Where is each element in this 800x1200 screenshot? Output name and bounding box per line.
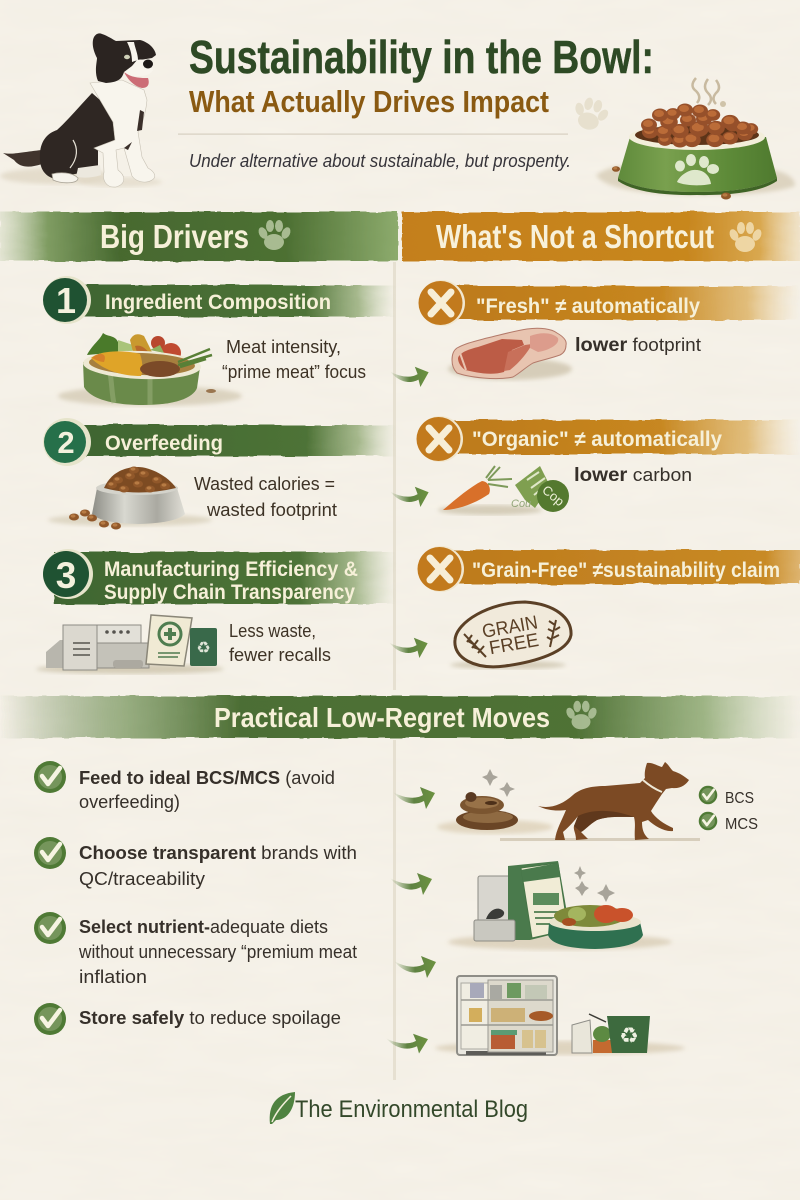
move 1: overfeeding)	[79, 792, 180, 812]
shortcut 3 heading	[418, 546, 800, 592]
driver 1 heading: 1	[56, 280, 76, 321]
move 2: QC/traceability	[79, 869, 205, 889]
icon: factory equipment, certificate and recycling bin: ♻	[196, 640, 211, 657]
driver 2 note: Wasted calories =	[194, 474, 335, 494]
shortcut 1 heading	[418, 280, 800, 326]
driver 1 note: “prime meat” focus	[222, 362, 366, 382]
icon: carrot and coupon: Cop	[539, 482, 567, 509]
arrow: move 2	[390, 873, 432, 895]
arrow: overfeeding to organic	[390, 487, 429, 507]
driver 2 heading: Overfeeding	[105, 432, 223, 455]
driver 1 note	[222, 337, 366, 382]
move 2: Choose transparent brands with	[79, 843, 357, 863]
move 3: Select nutrient-adequate diets	[79, 917, 328, 937]
arrow: move 3	[394, 956, 436, 978]
column divider lower	[393, 740, 396, 1080]
BCS and MCS checks: MCS	[725, 816, 758, 833]
move 4	[34, 1003, 341, 1035]
panel header: Big Drivers: Big Drivers	[100, 218, 249, 255]
illustration: fridge storage and recycling: ♻	[619, 1023, 639, 1048]
arrow: move 4	[386, 1034, 428, 1054]
shortcut 2 heading: "Organic" ≠ automatically	[472, 428, 722, 451]
icon: steak	[448, 328, 572, 380]
driver 1 heading	[43, 276, 396, 324]
section header: practical moves	[0, 696, 800, 738]
icon: kibble bowl with steam	[596, 78, 795, 200]
icon: carrot and coupon: Cou	[511, 498, 531, 510]
BCS and MCS checks	[699, 786, 758, 833]
shortcut 1 heading: "Fresh" ≠ automatically	[476, 295, 700, 318]
arrow: move 1	[393, 787, 435, 809]
move 3: inflation	[79, 967, 147, 987]
driver 2 note: wasted footprint	[206, 500, 337, 520]
section header: practical moves: Practical Low-Regret Moves	[214, 702, 550, 733]
driver 1 note: Meat intensity,	[226, 337, 341, 357]
icon: carrot and coupon	[438, 466, 569, 515]
move 1: Feed to ideal BCS/MCS (avoid	[79, 768, 335, 788]
panel header: What's Not a Shortcut: What's Not a Shortcut	[436, 218, 714, 255]
icon: grain free stamp	[450, 602, 571, 669]
driver 3 note: fewer recalls	[229, 645, 331, 665]
panel header: What's Not a Shortcut	[402, 212, 800, 261]
shortcut 2 note: lower carbon	[574, 465, 692, 486]
driver 3 heading: 3	[56, 555, 76, 596]
driver 3 heading	[43, 549, 396, 604]
BCS and MCS checks: BCS	[725, 790, 754, 807]
illustration: fridge storage and recycling	[435, 976, 685, 1055]
panel header: Big Drivers	[0, 212, 398, 261]
icon: factory equipment, certificate and recycling bin	[36, 615, 224, 674]
driver 3 note	[229, 621, 331, 665]
driver 3 heading: Supply Chain Transparency	[104, 581, 355, 604]
icon: overfull silver bowl	[48, 466, 212, 530]
driver 3 heading: Manufacturing Efficiency &	[104, 558, 358, 581]
title: Sustainability in the Bowl:	[189, 31, 654, 83]
shortcut 2 heading	[416, 416, 800, 462]
driver 2 note	[194, 474, 337, 520]
move 4: Store safely to reduce spoilage	[79, 1008, 341, 1028]
illustration: transparent brand bag, tin and bowl	[448, 861, 672, 950]
driver 2 heading	[43, 418, 396, 466]
shortcut 3 heading: "Grain-Free" ≠sustainability claim	[472, 559, 780, 582]
icon: grain free stamp: GRAIN	[481, 612, 539, 643]
icon: grain free stamp: FREE	[488, 630, 540, 659]
footer logo: The Environmental Blog	[295, 1096, 528, 1123]
move 3: without unnecessary “premium meat	[78, 942, 357, 962]
driver 2 heading: 2	[57, 425, 75, 460]
illustration: dog with stool check	[437, 762, 700, 841]
driver 3 note: Less waste,	[229, 621, 316, 641]
arrow: manufacturing to grain-free	[389, 638, 428, 658]
icon: food bowl	[58, 333, 242, 406]
move 2	[34, 837, 357, 889]
subtitle: What Actually Drives Impact	[189, 84, 549, 119]
header dog illustration	[0, 33, 162, 187]
tagline: Under alternative about sustainable, but prospenty.	[189, 151, 571, 171]
icon: faint paw	[569, 94, 613, 134]
shortcut 1 note: lower footprint	[575, 335, 701, 356]
column divider	[393, 262, 396, 690]
move 3	[34, 912, 357, 987]
move 1	[34, 761, 335, 812]
arrow: ingredient to fresh	[390, 367, 429, 387]
header divider	[178, 134, 568, 135]
driver 1 heading: Ingredient Composition	[105, 291, 331, 314]
